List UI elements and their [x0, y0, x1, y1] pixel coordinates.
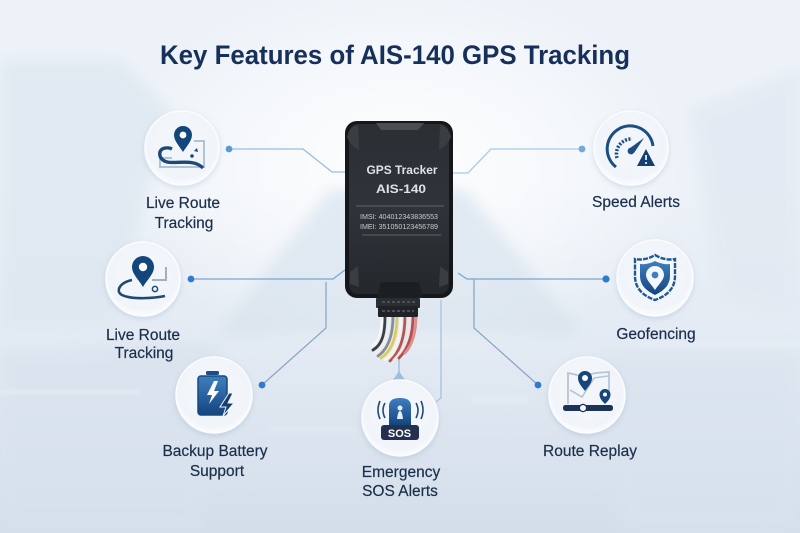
feature: live route tracking lower: Tracking: [115, 345, 173, 362]
connector: backup battery: [259, 282, 326, 388]
connector: speed alerts: [453, 146, 585, 173]
feature: backup battery: [162, 357, 268, 480]
connector: SOS: [393, 355, 405, 380]
icon: map with timeline slider: [563, 371, 613, 412]
device: GPS tracker: AIS-140: [376, 182, 426, 196]
feature: emergency SOS: [362, 380, 440, 500]
label: Backup Battery: [162, 443, 268, 460]
connector: SOS side line: [436, 300, 441, 402]
feature: live route tracking top: Tracking: [155, 215, 213, 232]
label: Live Route: [146, 195, 220, 212]
connector lines: [188, 146, 610, 402]
device label: GPS Tracker: [366, 165, 438, 177]
feature: live route tracking lower: [106, 242, 180, 362]
label: Speed Alerts: [592, 194, 680, 211]
icon: SOS beacon: SOS: [388, 428, 411, 440]
feature: live route tracking top: [145, 111, 220, 232]
icon: speedometer with warning: [607, 126, 655, 167]
case: [345, 121, 453, 298]
wires: [372, 316, 416, 361]
feature: route replay: [543, 357, 637, 460]
feature: backup battery: Support: [190, 463, 245, 480]
label: Geofencing: [616, 326, 696, 343]
feature: speed alerts: [592, 111, 680, 211]
label: Live Route: [106, 327, 180, 344]
icon: battery with bolt: [198, 371, 234, 416]
feature: geofencing: [616, 240, 696, 343]
device: GPS tracker: [345, 121, 453, 361]
label: Route Replay: [543, 443, 637, 460]
icon: route map pin: [160, 126, 204, 168]
icon: circular route pin: [119, 256, 166, 298]
connector: geofencing: [458, 273, 610, 283]
connector: live route tracking top: [226, 146, 345, 172]
connector: route replay: [474, 279, 541, 388]
icon: shield pin: [635, 255, 675, 300]
device identifiers: IMSI: 404012343836553: [360, 214, 438, 221]
feature: emergency SOS: SOS Alerts: [362, 483, 438, 500]
connector: live route tracking lower: [188, 270, 345, 282]
device: GPS tracker: IMEI: 351050123456789: [360, 224, 438, 231]
title: Key Features of AIS-140 GPS Tracking: [160, 40, 630, 70]
connector plug: [376, 298, 420, 308]
label: Emergency: [362, 464, 440, 481]
